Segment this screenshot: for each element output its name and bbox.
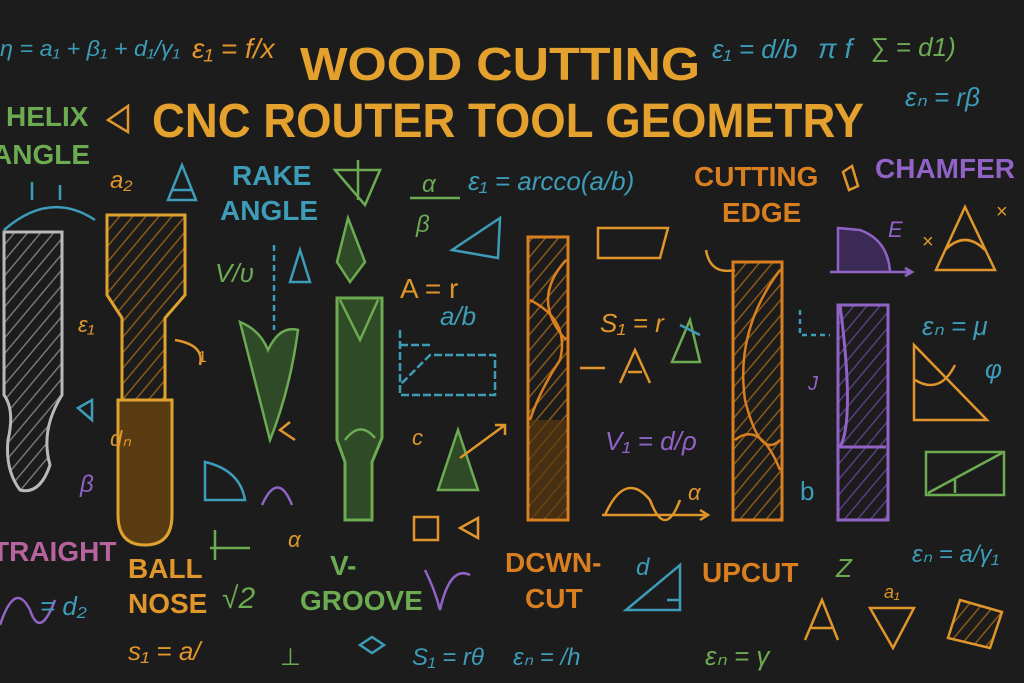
label: rake angle: RAKE bbox=[232, 160, 311, 191]
upper center shapes: α bbox=[688, 480, 702, 505]
title: WOOD CUTTING bbox=[300, 38, 700, 90]
label: downcut: CUT bbox=[525, 583, 583, 614]
tool: chamfer bit bbox=[800, 217, 912, 520]
right column shapes: φ bbox=[985, 354, 1002, 384]
formulas left: ε₁ bbox=[78, 312, 95, 337]
formulas left bbox=[78, 312, 207, 498]
formula: alpha beta: α bbox=[422, 171, 437, 198]
formula: top right: π f bbox=[818, 33, 856, 64]
tool: downcut bbox=[528, 237, 568, 520]
upper center shapes: S₁ = r bbox=[600, 308, 665, 338]
label: helix angle: HELIX bbox=[6, 101, 89, 132]
label: v-groove: V- bbox=[330, 550, 356, 581]
text: c bbox=[412, 425, 423, 450]
text: εₙ = γ bbox=[705, 641, 771, 671]
formula: alpha beta bbox=[410, 171, 460, 238]
formula: a/b: a/b bbox=[440, 301, 476, 331]
formulas left: β bbox=[79, 471, 94, 498]
label: ball nose: BALL bbox=[128, 553, 203, 584]
formula: alpha beta: β bbox=[415, 211, 430, 238]
right column shapes: Z bbox=[835, 553, 853, 583]
formula: bottom left: √2 bbox=[222, 582, 255, 615]
label: a2: a₂ bbox=[110, 167, 132, 194]
formula: top left: η = a₁ + β₁ + d₁/γ₁ bbox=[0, 36, 180, 61]
tool: ball nose bbox=[107, 215, 185, 545]
upper center shapes: V₁ = d/ρ bbox=[605, 426, 697, 456]
formula: bottom left: = d₂ bbox=[40, 591, 87, 621]
label: chamfer: CHAMFER bbox=[875, 153, 1015, 184]
formula: bottom left bbox=[0, 582, 255, 666]
formula: epsilon f/x: ε₁ = f/x bbox=[192, 33, 276, 64]
tool: V-groove bit bbox=[337, 298, 382, 520]
formulas left: 1 bbox=[198, 349, 207, 366]
formula: epsilon n r beta: εₙ = rβ bbox=[905, 82, 980, 112]
right column shapes: εₙ = μ bbox=[922, 311, 988, 341]
right column shapes: εₙ = a/γ₁ bbox=[912, 541, 999, 568]
label: v-groove: GROOVE bbox=[300, 585, 423, 616]
icon: green triangle arrow bbox=[438, 430, 478, 490]
icon: dashed box diagram bbox=[400, 330, 495, 395]
right column shapes: × bbox=[996, 201, 1008, 223]
text: V/υ bbox=[215, 258, 254, 288]
upper center shapes bbox=[580, 228, 708, 610]
misc small shapes center: α bbox=[288, 527, 302, 552]
title: CNC ROUTER TOOL GEOMETRY bbox=[152, 95, 864, 148]
formula: arccos: ε₁ = arcco(a/b) bbox=[468, 166, 634, 196]
icon: blue triangle center bbox=[452, 218, 500, 258]
label: cutting edge: EDGE bbox=[722, 197, 801, 228]
upper center shapes: d bbox=[636, 554, 650, 581]
right column shapes: × bbox=[922, 231, 934, 253]
formula: A=r: A = r bbox=[400, 273, 458, 304]
formulas left: dₙ bbox=[110, 426, 131, 451]
tool: chamfer bit: b bbox=[800, 476, 814, 506]
icon: blue triangle bbox=[168, 165, 196, 200]
label: rake angle: ANGLE bbox=[220, 195, 318, 226]
label: upcut: UPCUT bbox=[702, 557, 798, 588]
right column shapes bbox=[835, 201, 1008, 648]
title bbox=[152, 38, 864, 148]
label: cutting edge: CUTTING bbox=[694, 161, 818, 192]
misc small shapes center: S₁ = rθ bbox=[412, 644, 484, 671]
icon: protractor bbox=[4, 182, 95, 230]
misc small shapes center: ⊥ bbox=[280, 644, 301, 671]
label: ball nose: NOSE bbox=[128, 588, 207, 619]
misc small shapes center bbox=[205, 462, 580, 671]
label: downcut: DCWN- bbox=[505, 547, 601, 578]
formula: top right bbox=[712, 32, 956, 64]
right column shapes: a₁ bbox=[884, 582, 900, 602]
tool: upcut bbox=[733, 262, 782, 520]
tool: chamfer bit: J bbox=[807, 373, 819, 395]
icon: triangle bbox=[108, 106, 128, 132]
icon: V cutter shape bbox=[240, 322, 298, 440]
tool: straight bit bbox=[4, 232, 62, 491]
formula: top right: ∑ = d1) bbox=[870, 32, 956, 62]
tool: chamfer bit: E bbox=[888, 217, 903, 242]
misc small shapes center: εₙ = /h bbox=[513, 644, 580, 671]
formula: bottom left: s₁ = a/ bbox=[128, 636, 203, 666]
formula: top right: ε₁ = d/b bbox=[712, 34, 797, 64]
